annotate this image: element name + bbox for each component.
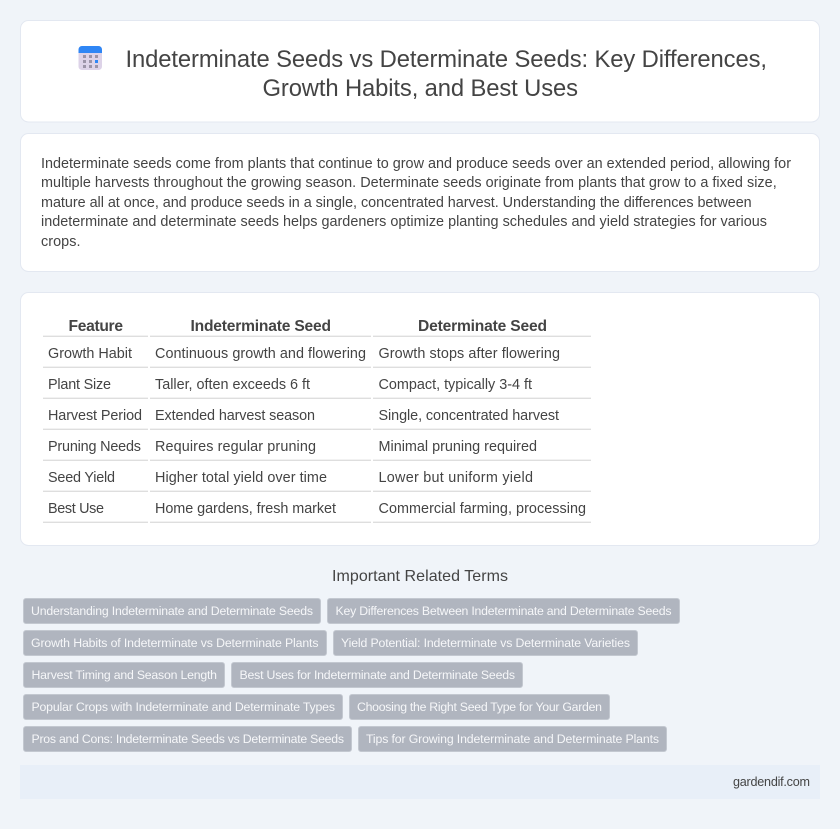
footer bar [20, 765, 820, 799]
icon: calendar [78, 46, 102, 70]
tag: Choosing the Right Seed Type for Your Garden [357, 700, 602, 714]
title: Indeterminate Seeds vs Determinate Seeds: Key Differences, [126, 46, 767, 73]
tag [328, 598, 680, 624]
row: plant size [48, 377, 532, 393]
row: seed yield [48, 470, 533, 486]
tag [358, 726, 666, 752]
row: best use: Home gardens, fresh market [155, 501, 336, 517]
row: plant size: Plant Size [48, 377, 111, 393]
row: seed yield: Seed Yield [48, 470, 115, 486]
row: growth habit: Continuous growth and flowering [155, 346, 366, 362]
row: best use: Commercial farming, processing [378, 501, 586, 517]
title [126, 46, 767, 102]
tag: Best Uses for Indeterminate and Determinate Seeds [240, 668, 515, 682]
heading: important related terms: Important Related Terms [332, 568, 508, 585]
row: pruning needs: Minimal pruning required [378, 439, 537, 455]
tag: Pros and Cons: Indeterminate Seeds vs Determinate Seeds [32, 732, 344, 746]
footer source: gardendif.com [733, 775, 810, 789]
tag: Popular Crops with Indeterminate and Determinate Types [32, 700, 335, 714]
tag [334, 630, 638, 656]
row: growth habit [48, 346, 560, 362]
intro text: multiple harvests throughout the growing season. Determinate seeds originate from plants that grow to a fixed size, [41, 175, 777, 191]
tag: Tips for Growing Indeterminate and Determinate Plants [366, 732, 659, 746]
row: plant size: Compact, typically 3-4 ft [378, 377, 532, 393]
row: best use [48, 501, 586, 517]
row: harvest period: Single, concentrated harvest [378, 408, 559, 424]
row: seed yield: Lower but uniform yield [378, 470, 533, 486]
table header [68, 318, 547, 335]
row: pruning needs: Requires regular pruning [155, 439, 316, 455]
title: Growth Habits, and Best Uses [262, 75, 578, 102]
intro text: indeterminate and determinate seeds helps gardeners optimize planting schedules and yield strategies for various [41, 214, 767, 230]
header panel [20, 20, 820, 122]
panel: comparison table [20, 292, 820, 546]
tag: Harvest Timing and Season Length [32, 668, 217, 682]
row: harvest period: Extended harvest season [155, 408, 315, 424]
table header: Feature [68, 318, 123, 335]
row: seed yield: Higher total yield over time [155, 470, 327, 486]
tag [24, 694, 342, 720]
tag [24, 630, 326, 656]
tag [24, 598, 320, 624]
intro text [41, 156, 791, 250]
row: growth habit: Growth Habit [48, 346, 132, 362]
tag: Understanding Indeterminate and Determinate Seeds [31, 604, 313, 618]
row: harvest period: Harvest Period [48, 408, 142, 424]
panel: introduction paragraph [20, 134, 820, 272]
tag: Yield Potential: Indeterminate vs Determinate Varieties [341, 636, 630, 650]
table header: Indeterminate Seed [190, 318, 331, 335]
row: best use: Best Use [48, 501, 104, 517]
row: harvest period [48, 408, 559, 424]
table rules [43, 336, 591, 522]
tag [232, 662, 522, 688]
tag [24, 726, 352, 752]
tag: Key Differences Between Indeterminate and Determinate Seeds [336, 604, 672, 618]
row: growth habit: Growth stops after flowering [378, 346, 560, 362]
intro text: mature all at once, and produce seeds in a single, concentrated harvest. Understanding the differences between [41, 195, 752, 211]
related term tags [24, 598, 680, 752]
tag: Growth Habits of Indeterminate vs Determinate Plants [31, 636, 318, 650]
tag [350, 694, 610, 720]
tag [24, 662, 224, 688]
row: pruning needs [48, 439, 537, 455]
intro text: Indeterminate seeds come from plants that continue to grow and produce seeds over an extended period, allowing for [41, 156, 791, 172]
table header: Determinate Seed [418, 318, 547, 335]
row: pruning needs: Pruning Needs [48, 439, 141, 455]
row: plant size: Taller, often exceeds 6 ft [155, 377, 310, 393]
intro text: crops. [41, 234, 80, 250]
